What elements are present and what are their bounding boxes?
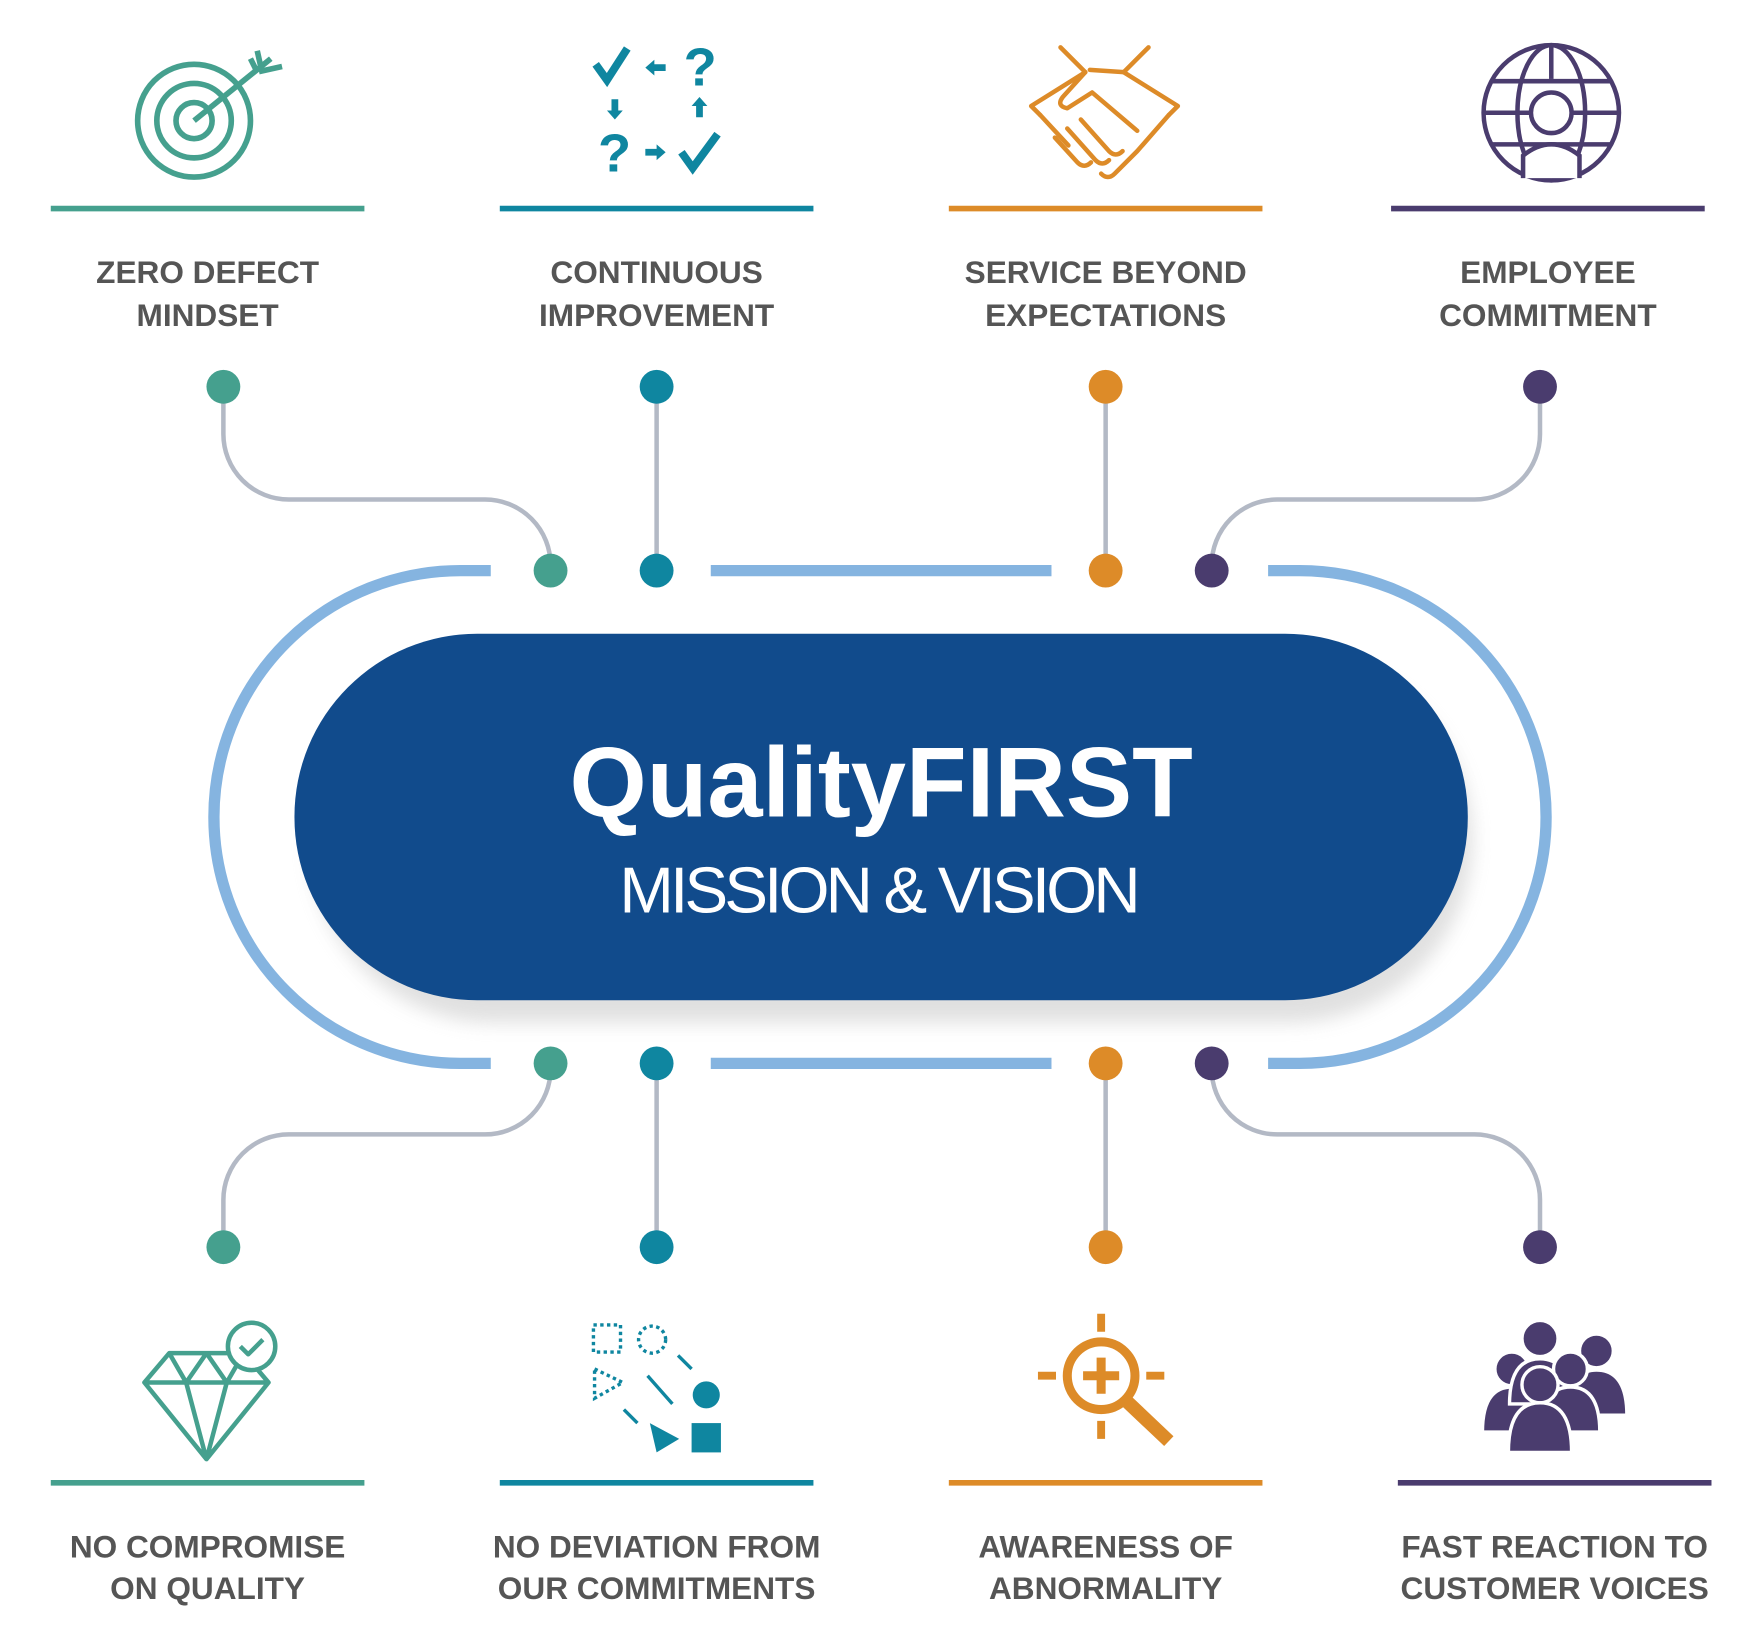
central pill (294, 634, 1472, 1023)
title: QualityFIRST (569, 727, 1193, 838)
outer blue track (214, 571, 1546, 1063)
panel: zero defect: ZERO DEFECT (96, 254, 319, 290)
panel: continuous improvement: IMPROVEMENT (539, 297, 774, 333)
panel: fast reaction: CUSTOMER VOICES (1401, 1570, 1709, 1606)
panel: awareness (949, 1314, 1262, 1606)
panel: fast reaction (1398, 1320, 1711, 1606)
panel: no compromise: NO COMPROMISE (70, 1528, 345, 1564)
icon: diamond (144, 1323, 275, 1459)
panel: zero defect: MINDSET (137, 297, 279, 333)
panel: service: EXPECTATIONS (985, 297, 1226, 333)
panel: no compromise: ON QUALITY (110, 1570, 305, 1606)
panel: employee (1391, 45, 1705, 333)
icon: checks and questions: ? (684, 38, 717, 98)
icon: target (138, 51, 282, 177)
icon: globe person (1484, 45, 1619, 180)
panel: no compromise (51, 1323, 364, 1606)
icon: checks and questions (596, 38, 718, 183)
connectors (223, 387, 1540, 1247)
panel: awareness: AWARENESS OF (978, 1528, 1233, 1564)
panel: no deviation (493, 1325, 820, 1606)
panel: awareness: ABNORMALITY (989, 1570, 1222, 1606)
panel: continuous improvement (500, 38, 813, 333)
panel: no deviation: OUR COMMITMENTS (498, 1570, 815, 1606)
icon: handshake (1031, 47, 1178, 177)
icon: checks and questions: ? (598, 123, 631, 183)
panel: employee: EMPLOYEE (1460, 254, 1636, 290)
panel: zero defect (51, 51, 364, 333)
subtitle: MISSION & VISION (619, 853, 1141, 926)
panel: fast reaction: FAST REACTION TO (1401, 1528, 1708, 1564)
panel: continuous improvement: CONTINUOUS (550, 254, 763, 290)
panel: service (949, 47, 1262, 333)
panel: employee: COMMITMENT (1439, 297, 1657, 333)
icon: shapes (593, 1325, 721, 1452)
icon: group of people (1482, 1320, 1627, 1452)
dots (206, 370, 1557, 1264)
panel: no deviation: NO DEVIATION FROM (493, 1528, 820, 1564)
panel: service: SERVICE BEYOND (965, 254, 1247, 290)
icon: magnifier plus (1038, 1314, 1169, 1441)
